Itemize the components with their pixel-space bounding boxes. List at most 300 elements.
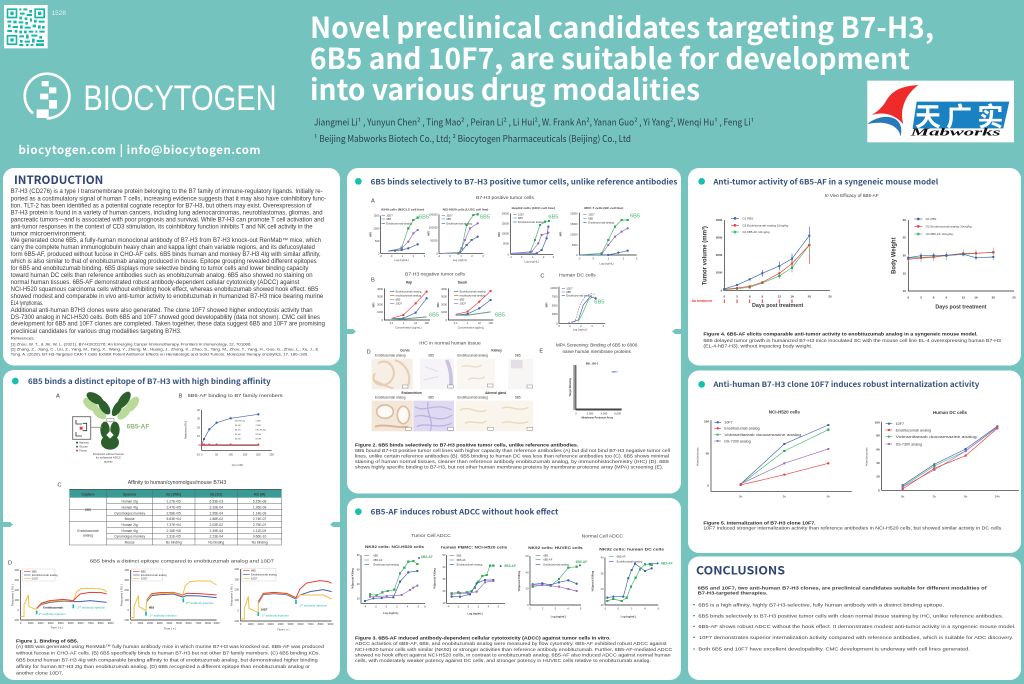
sensorgram: 6B5: 100 — [125, 598, 130, 602]
line chart: NK92 HUVEC: 0 — [527, 603, 529, 607]
sensorgram: 6B5: 8000 — [205, 621, 211, 625]
line chart: NK92 HUVEC: 3 — [555, 606, 557, 610]
line chart: tumor volume: 0 — [721, 288, 723, 292]
line chart: Raji: 2000 — [377, 302, 384, 306]
subheading: normal cell ADCC: Normal Cell ADCC — [582, 533, 623, 539]
line chart: PBMC NCI-H520: Enobituzumab analog — [457, 563, 483, 567]
poster number: 1528 — [52, 10, 66, 17]
caption: figure 5: Figure 5. Internalization of B7-H3 clone 10F7. — [703, 520, 816, 526]
line chart: B7 family binding: 200 — [256, 452, 261, 456]
line chart: PBMC NCI-H520: 6B5-AF — [457, 558, 466, 562]
sensorgram: enobituzumab: 8000 — [98, 621, 104, 625]
caption: figure 4: (EL-4-hB7-H3), without impacting body weight. — [703, 343, 812, 349]
sensorgram: 10D7: 10D7 — [251, 577, 258, 581]
sensorgram: enobituzumab: 2000 — [38, 621, 44, 625]
sensorgram: enobituzumab: -100 — [14, 618, 20, 622]
panel: introduction — [3, 168, 340, 366]
IHC tissue image grid: 6B5 — [515, 395, 521, 399]
text block: introduction body: We generated clone 6B5, a fully-human monoclonal antibody of B7-H3 from B7-H3 knock-out RenMab™ mice, which — [11, 237, 321, 244]
line chart: Daudi: MFI — [436, 302, 440, 307]
line chart: B7 family binding: CD80 — [256, 421, 262, 423]
text block: introduction body: anti-tumor responses in the context of CD3 stimulation, its coinhibitory function inhibits T and NK cell activity in the — [11, 225, 313, 231]
scatter chart: MPA — [568, 362, 622, 419]
line chart: NK92 NCI-H520: 6B5-AF — [373, 558, 383, 562]
line chart: NK92 human DC — [590, 547, 673, 618]
text block: introduction body: tion. TLT-2 has been identified as a potential cognate receptor for B7-H3, but others may exist. Overexpression of — [11, 203, 312, 209]
line chart: human DC cells: 6B5 — [566, 290, 572, 294]
sensorgram: 6B5: 5000 — [176, 621, 182, 625]
sensorgram: 6B5: Response ( RU ) — [120, 584, 124, 606]
line chart: NK92 HUVEC: 6B5 — [543, 554, 549, 558]
heading: ADCC: 6B5-AF induces robust ADCC without hook effect — [371, 507, 558, 518]
references: Tong, A. (2020). B7-H3-Targeted CAR-T Cells Exhibit Potent Antitumor Effects on Hematologic and Solid Tumors. Molecular therapy oncolytics, 17, 180–189. — [11, 352, 308, 357]
line chart: HepG2: 10000 — [502, 231, 510, 235]
line chart: DC internalization: 100 — [875, 420, 880, 424]
caption: figure 1: (A) 6B5 was generated using RenMab™ fully human antibody mice in which murine B7-H3 was knocked out. 6B5-AF was produced — [16, 644, 324, 650]
caption: figure 2: staining of human normal tissues, cleaner than reference antibody enobituzumab analog, by immunohistochemistry (IHC) (D). 6B5 — [355, 459, 669, 465]
line chart: MCF-7 — [559, 206, 640, 265]
line chart: DC internalization: 24h — [995, 495, 1000, 499]
label A: A — [56, 393, 60, 399]
sensorgram: 10D7: 400 — [235, 567, 239, 571]
line chart: tumor volume: 4000 — [716, 218, 723, 222]
line chart: NK92 HUVEC: 1 — [529, 606, 531, 610]
caption: figure 3 — [355, 635, 673, 664]
line chart: B7 family binding: 10 — [197, 434, 200, 438]
line chart: B7 family binding: hB7-H3 2Ig — [235, 421, 245, 423]
references: [1] Zhou, W. T., & Jin, W. L. (2021). B7-H3/CD276: An Emerging Cancer Immunotherapy. Frontiers in immunology, 12, 701006. — [11, 341, 252, 346]
IHC tissue image grid: 6B5 — [515, 354, 521, 358]
line chart: NK92 HUVEC: 5 — [580, 606, 582, 610]
line chart: PBMC NCI-H520: 40 — [442, 565, 446, 569]
line chart: B7 family binding: Response (RU) — [184, 421, 188, 439]
IHC tissue image grid: 6B5 — [428, 354, 434, 358]
summary statement: B7-H3-targeted therapies. — [698, 590, 768, 596]
line chart: NCI-H520 internalization: NCI-H520 cells — [769, 409, 800, 414]
sensorgram: 10D7: Time ( s ) — [277, 628, 290, 632]
line chart: NCI-H520 internalization: 0 — [707, 483, 709, 487]
line chart: Daudi: enobituzumab analog — [460, 293, 486, 297]
line chart: MCF-7: MCF-7 cells (BC cell line) — [584, 206, 623, 210]
text block: introduction body: form 6B5-AF, produced without fucose in CHO-AF cells. 6B5 binds human and monkey B7-H3 4Ig with similar affinity, — [11, 252, 321, 258]
caption: figure 2: 6B5 bound B7-H3 positive tumor cell lines with higher capacity than reference antibodies (A) but did not bind B7-H3 negative tumor cell — [355, 448, 670, 454]
caption: figure 1: Figure 1. Binding of 6B5. — [16, 638, 79, 644]
line chart: A549: Enobituzumab analog — [386, 221, 413, 225]
line chart: human DC cells: 7500 — [552, 295, 558, 299]
line chart: NK92 NCI-H520: NK92 cells: NCI-H520 cells — [365, 545, 424, 549]
sensorgram: 6B5: 4000 — [166, 621, 173, 625]
scatter chart: MPA: 4,000 — [601, 411, 608, 415]
sensorgram: 6B5: 1ˢᵗ antibody injection — [149, 613, 177, 617]
caption: figure 3: Figure 3. 6B5-AF induced antibody-dependent cellular cytotoxicity (ADCC) against tumor cells in vitro. — [355, 635, 611, 641]
line chart: NCI-H520 — [426, 207, 490, 262]
line chart: Raji: Enobituzumab analog — [396, 290, 422, 294]
line chart: tumor volume: 16 — [790, 295, 794, 299]
table: affinity: ka (1/Ms) — [166, 492, 181, 496]
line chart: HepG2: HepG2 cells (HCC cell line) — [512, 206, 555, 210]
references — [11, 336, 319, 357]
line chart: NK92 human DC: 2 — [631, 606, 633, 610]
caption: figure 4: Figure 4. 6B5-AF elicits comparable anti-tumor activity to enobituzumab analog in a syngeneic mouse model. — [703, 332, 978, 338]
line chart: human DC cells: 3 — [591, 324, 593, 328]
line chart: tumor volume: 25 — [828, 295, 832, 299]
table: affinity: Mouse — [125, 541, 135, 545]
line chart: NK92 human DC: 30 — [601, 571, 604, 575]
line chart: DC internalization: 40 — [876, 461, 880, 465]
line chart: tumor volume: 20 — [808, 295, 811, 299]
line chart: NCI-H520: Enobituzumab analog — [446, 221, 473, 225]
line chart: human DC cells: Log (ng/mL) — [573, 328, 587, 332]
subheading: tumor cell ADCC: Tumor Cell ADCC — [411, 533, 451, 539]
line chart: tumor volume: Ab treatment — [692, 299, 713, 303]
line chart: NCI-H520 internalization: 6h — [827, 495, 830, 499]
text block: introduction body: normal human tissues. 6B5-AF demonstrated robust antibody-dependent cellular cytotoxicity (ADCC) against — [11, 280, 300, 286]
text block: introduction body: which is also similar to that of enobituzumab analog produced in house. Epitope grouping revealed different epitopes — [10, 259, 317, 265]
sensorgram: 6B5: 2000 — [147, 621, 153, 625]
line chart: human DC cells: 4 — [603, 324, 605, 328]
line chart: NK92 human DC: 6B5-AF — [661, 561, 673, 565]
line chart: body weight: 25 — [903, 236, 906, 240]
line chart: Raji: 100 — [424, 321, 429, 325]
panel: epitope and binding affinity — [3, 370, 340, 680]
panel: internalization — [688, 370, 1021, 553]
bullet list: 6B5-AF shows robust ADCC without the hook effect. It demonstrates modest anti-tumor activity in a syngeneic mouse model. — [698, 624, 1016, 630]
panel: ADCC — [347, 498, 681, 680]
icon: antibody 6B5-AF diagram — [73, 389, 149, 463]
IHC tissue image grid: Kidney — [491, 349, 502, 353]
line chart: A549: A549 cells (NSCLC cell line) — [381, 207, 424, 211]
line chart: NCI-H520 internalization: Enobituzumab analog — [724, 427, 760, 431]
line chart: MCF-7: 1 — [608, 256, 610, 260]
section bullet — [355, 178, 362, 185]
sensorgram: 10D7: 100 — [235, 598, 239, 602]
icon: antibody 6B5-AF diagram: Fucose — [79, 450, 88, 452]
table: affinity: 1.11E-09 — [253, 529, 266, 533]
line chart: Daudi: Enobituzumab analog — [460, 290, 486, 294]
text block: introduction body: tumor microenvironment. — [11, 232, 87, 238]
label C: C — [540, 273, 544, 279]
line chart: DC internalization: 10F7 — [896, 422, 904, 426]
line chart: NCI-H520 internalization: %endocytosis — [695, 447, 699, 466]
text block: introduction body: for 6B5 and enobituzumab binding. 6B5 displays more selective binding to tumor cells and lower binding capacity — [11, 266, 308, 272]
line chart: HepG2: 1 — [532, 255, 534, 259]
scatter chart: MPA: 2,000 — [587, 411, 594, 415]
line chart: body weight: 16 — [974, 295, 978, 299]
line chart: PBMC NCI-H520: human PBMC: NCI-H520 cells — [441, 546, 508, 550]
line chart: DC internalization: %endocytosis — [865, 447, 869, 466]
line chart: NK92 NCI-H520: 6B5 — [373, 554, 379, 558]
line chart: NK92 NCI-H520: 6 — [418, 605, 420, 609]
line chart: DC internalization: 0h — [901, 495, 905, 499]
line chart: B7 family binding: 20 — [197, 425, 200, 429]
IHC tissue image grid: Endometrium — [401, 391, 422, 395]
label E: E — [539, 348, 543, 354]
line chart: NCI-H520: 6B5 — [480, 215, 490, 221]
heading: anti-tumor: Anti-tumor activity of 6B5-AF in a syngeneic mouse model — [712, 176, 939, 187]
sensorgram: 10D7: 2ⁿᵈ antibody injection — [299, 603, 327, 607]
line chart: Daudi: 6B5 — [495, 313, 505, 319]
bullet list — [693, 602, 1016, 653]
line chart: human DC cells — [545, 272, 605, 332]
table title: Affinity to human/cynomolgus/mouse B7H3 — [128, 480, 226, 486]
line chart: Raji: 4000 — [377, 287, 384, 291]
line chart: A549: -2 — [379, 254, 382, 258]
subheading: MPA screening: naïve human membrane proteins — [562, 349, 631, 354]
line chart: MCF-7: Enobituzumab analog — [588, 220, 615, 224]
icon: antibody 6B5-AF diagram: for enhanced ADCC — [96, 456, 121, 460]
line chart: B7 family binding: Con (nM) — [232, 463, 243, 467]
label C: C — [57, 483, 61, 489]
sensorgram: enobituzumab: Response ( RU ) — [10, 584, 14, 606]
line chart: NK92 human DC: NK92 cells: human DC cells — [599, 547, 664, 551]
caption: figure 4 — [703, 332, 1001, 349]
panel: anti-tumor activity — [688, 168, 1021, 366]
text block: introduction body: pancreatic tumors—and is associated with poor prognosis and survival. While B7-H3 can promote T cell activation and — [11, 217, 324, 223]
panel: selective binding — [347, 168, 681, 494]
line chart: tumor volume: G3 6B5-AF 10mg/kg — [742, 230, 770, 234]
sensorgram: enobituzumab: 1ˢᵗ antibody injection — [38, 612, 66, 616]
IHC tissue image grid: Enobituzumab analog — [375, 395, 406, 399]
table: affinity: 2.74E-07 — [253, 517, 267, 521]
line chart: PBMC NCI-H520: 2 — [478, 605, 480, 609]
subheading: negative tumor cells: B7-H3 negative tumor cells — [405, 271, 465, 277]
line chart: NK92 human DC: 0 — [618, 606, 620, 610]
sensorgram: 6B5: 7000 — [195, 621, 202, 625]
line chart: NCI-H520 internalization — [695, 409, 852, 499]
sensorgram: enobituzumab: 200 — [15, 588, 20, 592]
line chart: PBMC NCI-H520: 20 — [442, 589, 446, 593]
QR code — [4, 5, 48, 48]
line chart: NK92 NCI-H520: 80 — [357, 553, 360, 557]
text block: introduction body: showed modest and comparable in vivo anti-tumor activity to enobituzumab in humanized B7-H3 mice bearing murine — [11, 294, 324, 300]
line chart: tumor volume: Tumor volume (mm³) — [701, 226, 708, 285]
line chart: MCF-7: MFI — [559, 231, 563, 236]
subheading: IHC: IHC in normal human tissue — [419, 340, 481, 346]
line chart: NK92 HUVEC: NK92 cells: HUVEC cells — [528, 546, 583, 550]
line chart: B7 family binding: 0 — [201, 452, 203, 456]
line chart: Daudi: Concentration (pg/mL) — [458, 326, 484, 330]
line chart: NCI-H520: -2 — [438, 254, 441, 258]
line chart: DC internalization: Vobramitamab duocarmazine analog — [896, 435, 977, 439]
table: affinity: 6.83E+04 — [166, 517, 181, 521]
line chart: Daudi: 0.1 — [454, 321, 458, 325]
line chart: PBMC NCI-H520: 0 — [468, 605, 470, 609]
sensorgram: 10D7: 300 — [235, 577, 239, 581]
line chart: NK92 HUVEC: 20 — [526, 587, 529, 591]
label D: D — [367, 349, 371, 355]
sensorgram: 6B5: 400 — [125, 568, 130, 572]
line chart: HepG2: Log (ng/mL) — [524, 259, 539, 263]
table: affinity: Species — [123, 492, 136, 496]
line chart: MCF-7: 6B5 — [630, 214, 640, 220]
line chart: NCI-H520: 150000 — [429, 212, 438, 216]
line chart: NK92 NCI-H520: 2 — [396, 605, 398, 609]
summary statement: 6B5 and 10F7, two anti-human B7-H3 clones, are preclinical candidates suitable for different modalities of — [698, 585, 987, 591]
caption: figure 2: lines, unlike certain reference antibodies (B). 6B5 binding to human DC was less than reference antibodies too (C). 6B5 shows minimal — [355, 454, 669, 460]
line chart: NK92 NCI-H520: 60 — [357, 568, 360, 572]
table: affinity: 3.10E-04 — [210, 505, 223, 509]
line chart: NK92 human DC: %Special Killing — [590, 570, 594, 591]
scatter chart: MPA: 6,000 — [614, 411, 621, 415]
line chart: NK92 human DC: 40 — [601, 555, 604, 559]
line chart: NK92 HUVEC: 6B5-AF — [543, 558, 553, 562]
caption: figure 1: 6B5 bound human B7-H3 4Ig with comparable binding affinity to that of enobituzumab analog, but demonstrated higher binding — [16, 657, 318, 663]
caption: figure 2 — [355, 442, 670, 471]
line chart: NK92 NCI-H520: Log (ng/mL) — [383, 611, 398, 615]
text block: introduction body: B7-H3 protein is found in a variety of human cancers, including lung adenocarcinomas, neuroblastomas, gliomas, and — [11, 210, 323, 216]
table: affinity: 2.58E+05 — [166, 511, 181, 515]
sensorgram: 6B5: 300 — [125, 578, 130, 582]
line chart: NCI-H520: 1 — [460, 254, 462, 258]
line chart: NK92 NCI-H520: %Special Killing — [351, 568, 355, 589]
line chart: body weight: G2 Enobituzumab analog 10mg/kg — [926, 224, 972, 228]
line chart: DC internalization: 60 — [876, 447, 880, 451]
table: affinity: Enobituzumab — [77, 529, 99, 533]
line chart: tumor volume: 0 — [723, 295, 725, 299]
sensorgram: 10D7: 9000 — [328, 622, 334, 626]
text block: introduction body: toward human DC cells than reference antibodies such as enobituzumab analog. 6B5 also showed no staining on — [11, 273, 313, 279]
sensorgram: enobituzumab: 4000 — [58, 621, 64, 625]
line chart: Daudi: 10 — [478, 321, 481, 325]
line chart: A549: 1000 — [373, 226, 380, 230]
bullet list: 10F7 demonstrates superior internalization activity compared with reference antibodies, which is suitable for ADC discovery. — [699, 635, 1013, 641]
line chart: tumor volume: 3000 — [716, 236, 723, 240]
line chart: NK92 HUVEC: 4 — [567, 606, 569, 610]
line chart: DC internalization: 3h — [933, 495, 936, 499]
table: affinity: Human 4Ig — [122, 505, 138, 509]
logo: Biocytogen: BIOCYTOGEN — [83, 79, 277, 118]
line chart: tumor volume: 2000 — [716, 253, 723, 257]
line chart: human DC cells: 0 — [558, 324, 560, 328]
sensorgram: 10D7: 200 — [235, 588, 239, 592]
section bullet — [12, 378, 19, 384]
line chart: Daudi: 3000 — [441, 295, 447, 299]
line chart: A549: Log (ng/mL) — [394, 258, 409, 262]
line chart: HepG2: 5000 — [503, 241, 509, 245]
table: affinity: 6B5 — [85, 508, 91, 512]
IHC tissue image grid: Enobituzumab analog — [457, 395, 488, 399]
section bullet — [698, 381, 705, 388]
sensorgram: 10D7 — [230, 567, 334, 632]
line chart: Raji: 0 — [382, 318, 384, 322]
line chart: PBMC NCI-H520: -2 — [457, 605, 460, 609]
heading: selective binding: 6B5 binds selectively to B7-H3 positive tumor cells, unlike reference antibodies — [371, 176, 678, 187]
IHC tissue image grid — [372, 349, 533, 431]
sensorgram: enobituzumab: 1000 — [28, 621, 34, 625]
line chart: body weight: 30 — [903, 218, 906, 222]
logo: Mabworks: 天广实 — [915, 97, 1003, 134]
line chart: NK92 NCI-H520: 6B5-AF — [421, 555, 433, 559]
title: Novel preclinical candidates targeting B7-H3, — [310, 5, 934, 47]
sensorgram: enobituzumab: 0 — [18, 608, 20, 612]
line chart: PBMC NCI-H520 — [433, 546, 516, 616]
scatter chart: MPA: Membrane Proteome Array — [581, 416, 614, 419]
line chart: Raji: 10 — [414, 321, 418, 325]
sensorgram: 10D7: 0 — [237, 608, 239, 612]
line chart: Daudi: 100 — [488, 321, 493, 325]
line chart: tumor volume: G1 PBS — [742, 216, 753, 220]
sensorgram: enobituzumab: 5000 — [68, 621, 74, 625]
line chart: Daudi: 6B5 — [460, 297, 465, 301]
caption: figure 1 — [16, 638, 324, 677]
sensorgram: enobituzumab: Enobituzumab analog — [32, 573, 58, 577]
line chart: human DC cells: 10000 — [550, 286, 558, 290]
IHC tissue image grid: Enobituzumab analog — [375, 354, 406, 358]
line chart: HepG2: 6B5 — [518, 216, 523, 220]
line chart: B7 family binding — [184, 408, 274, 467]
sensorgram: 6B5: 3000 — [157, 621, 163, 625]
panel: conclusions — [688, 556, 1021, 680]
line chart: NK92 NCI-H520: Enobituzumab analog — [373, 563, 400, 567]
sensorgram: 6B5: 10D7 — [141, 577, 148, 581]
line chart: PBMC NCI-H520: -4 — [447, 605, 450, 609]
line chart: MCF-7: 5000 — [572, 243, 578, 247]
icon: antibody 6B5-AF diagram: Glucose — [79, 446, 89, 448]
sensorgram: 6B5: 0 — [128, 608, 130, 612]
sensorgram: 10D7: Response ( RU ) — [230, 584, 234, 606]
line chart: DC internalization: 0 — [878, 488, 880, 492]
line chart: DC internalization: 6h — [964, 495, 968, 499]
line chart: DC internalization: Human DC cells — [933, 410, 968, 415]
table: affinity: 5.15E-08 — [253, 499, 267, 503]
line chart: human DC cells: Human DC cells — [559, 272, 596, 278]
line chart: HepG2: 10D7 — [518, 212, 525, 216]
line chart: tumor volume: 3 — [736, 295, 738, 299]
chart title: epitope comparison: 6B5 binds a distinct epitope compared to enobituzumab analog and 10D7 — [90, 558, 274, 564]
IHC tissue image grid: Adrenal gland — [485, 391, 506, 395]
line chart: B7 family binding: CD86 — [256, 425, 262, 427]
line chart: PBMC NCI-H520: 10 — [442, 601, 446, 605]
sensorgram: 6B5: 1000 — [137, 621, 144, 625]
line chart: Raji: 6B5 — [429, 313, 439, 319]
line chart: human DC cells: MFI — [545, 302, 549, 307]
line chart: NK92 human DC: Log (ng/mL) — [621, 614, 636, 618]
line chart: PBMC NCI-H520: 30 — [442, 577, 446, 581]
title: into various drug modalities — [310, 67, 700, 109]
sensorgram: 6B5: 6B5 — [141, 569, 146, 573]
line chart: A549: 1 — [402, 254, 404, 258]
table: affinity — [69, 489, 282, 545]
sensorgram: 6B5: 200 — [125, 588, 130, 592]
line chart: NK92 HUVEC: Enobituzumab analog — [543, 562, 570, 566]
line chart: NK92 human DC: 6B5-AF — [617, 555, 626, 559]
line chart: NCI-H520 internalization: DS-7300 analog — [724, 439, 751, 443]
line chart: human DC cells: 2500 — [552, 312, 558, 316]
sensorgram: 6B5: 0 — [130, 621, 132, 625]
line chart: NK92 human DC: 20 — [601, 587, 604, 591]
line chart: A549: 1500 — [373, 214, 380, 218]
line chart: NK92 HUVEC: Log (ng/mL) — [551, 614, 566, 618]
table: affinity: 1.26E-09 — [253, 505, 267, 509]
line chart: NK92 HUVEC: 40 — [526, 570, 529, 574]
caption: figure 1: another clone 10D7. — [16, 671, 63, 677]
line chart: NK92 NCI-H520: -2 — [374, 605, 377, 609]
table: affinity: 2.95E-04 — [210, 511, 223, 515]
sensorgram: 6B5: 2ⁿᵈ antibody injection — [186, 601, 214, 605]
line chart: NCI-H520 internalization: Vobramitamab duocarmazine analog — [724, 433, 801, 437]
caption: figure 2: shows highly specific binding to B7-H3, but not other human membrane proteins by membrane proteome array (MPA) screening (E). — [355, 465, 663, 471]
text block: introduction body: EL4 lymphomas. — [11, 301, 44, 307]
caption: figure 3: showed no hook effect against NCI-H520 cells, in contrast to enobituzumab analog. 6B5-AF also induced ADCC against normal human — [355, 652, 671, 658]
heading: introduction: INTRODUCTION — [14, 172, 103, 188]
bullet list: Both 6B5 and 10F7 have excellent developability. CMC development is underway with cell lines generated. — [698, 647, 970, 653]
line chart: tumor volume: 9 — [761, 295, 763, 299]
caption: figure 1: affinity for human B7-H3 2Ig than enobituzumab analog. (D) 6B5 recognized a different epitope than enobituzumab analog or — [16, 664, 310, 670]
chart title: B7 family binding: 6B5-AF binding to B7 family members — [188, 393, 283, 399]
sensorgram: 10D7: 0 — [240, 622, 242, 626]
line chart: human DC cells: Enobituzumab analog — [566, 293, 593, 297]
line chart: B7 family binding: 40 — [197, 408, 200, 412]
